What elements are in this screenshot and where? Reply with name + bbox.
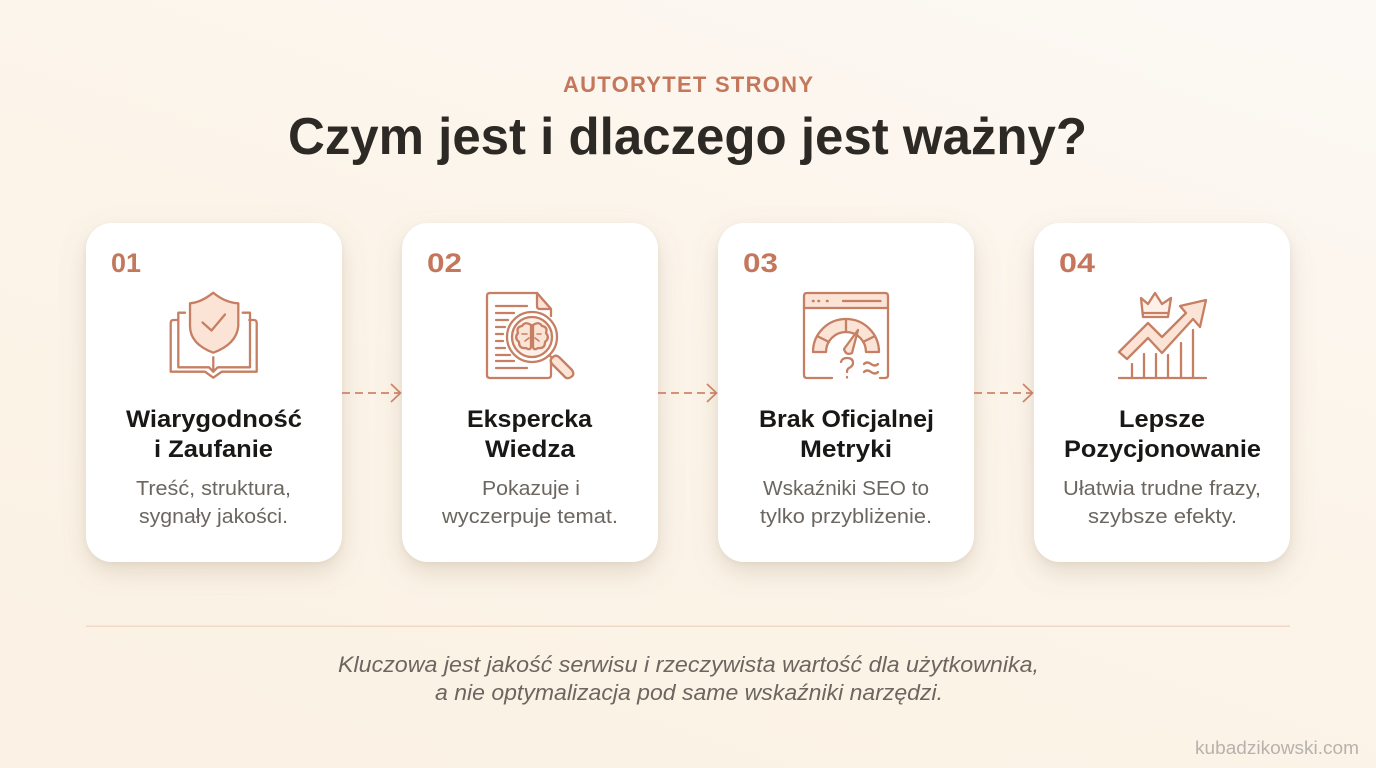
- card 02 description: wyczerpuje temat.: [441, 506, 618, 528]
- card 01 heading: [126, 406, 302, 463]
- icon: shield on open book: [171, 293, 257, 378]
- arrow: card 01 to 02: [342, 384, 400, 402]
- card 04 heading: Pozycjonowanie: [1064, 436, 1261, 463]
- card 01 number: 01: [111, 248, 141, 278]
- closing statement: [338, 652, 1039, 705]
- title: Czym jest i dlaczego jest ważny?: [288, 108, 1087, 166]
- card 03 heading: Brak Oficjalnej: [759, 406, 934, 433]
- arrow: card 03 to 04: [974, 384, 1032, 402]
- card 02 description: Pokazuje i: [482, 478, 580, 500]
- card 03 number: 03: [743, 248, 778, 278]
- panel: card 03: [718, 223, 974, 562]
- icon: document with magnifier and brain: [487, 293, 573, 378]
- panel: card 01: [86, 223, 342, 562]
- card 01 description: sygnały jakości.: [139, 506, 288, 528]
- closing statement: Kluczowa jest jakość serwisu i rzeczywista wartość dla użytkownika,: [338, 652, 1039, 677]
- card 02 description: [441, 478, 618, 528]
- arrow: card 02 to 03: [658, 384, 716, 402]
- card 04 heading: Lepsze: [1119, 406, 1205, 433]
- icon: rising arrow with crown and bars: [1119, 293, 1206, 378]
- icon: browser window with gauge: [804, 293, 888, 378]
- card 01 heading: i Zaufanie: [154, 436, 273, 463]
- card 04 number: 04: [1059, 248, 1095, 278]
- card 01 description: [136, 478, 291, 528]
- eyebrow label: AUTORYTET STRONY: [563, 72, 813, 97]
- card 03 heading: [759, 406, 934, 463]
- card 02 heading: Ekspercka: [467, 406, 593, 433]
- card 04 heading: [1064, 406, 1261, 463]
- card 01 description: Treść, struktura,: [136, 478, 291, 500]
- closing statement: a nie optymalizacja pod same wskaźniki narzędzi.: [435, 680, 943, 705]
- card 04 description: szybsze efekty.: [1088, 506, 1237, 528]
- card 01 heading: Wiarygodność: [126, 406, 302, 433]
- panel: card 04: [1034, 223, 1290, 562]
- card 03 description: tylko przybliżenie.: [760, 506, 932, 528]
- card 02 heading: Wiedza: [485, 436, 576, 463]
- watermark: kubadzikowski.com: [1195, 738, 1359, 758]
- card 02 number: 02: [427, 248, 462, 278]
- card 04 description: [1063, 478, 1261, 528]
- card 03 heading: Metryki: [800, 436, 892, 463]
- card 03 description: [760, 478, 932, 528]
- card 02 heading: [467, 406, 593, 463]
- card 03 description: Wskaźniki SEO to: [763, 478, 929, 500]
- card 04 description: Ułatwia trudne frazy,: [1063, 478, 1261, 500]
- panel: card 02: [402, 223, 658, 562]
